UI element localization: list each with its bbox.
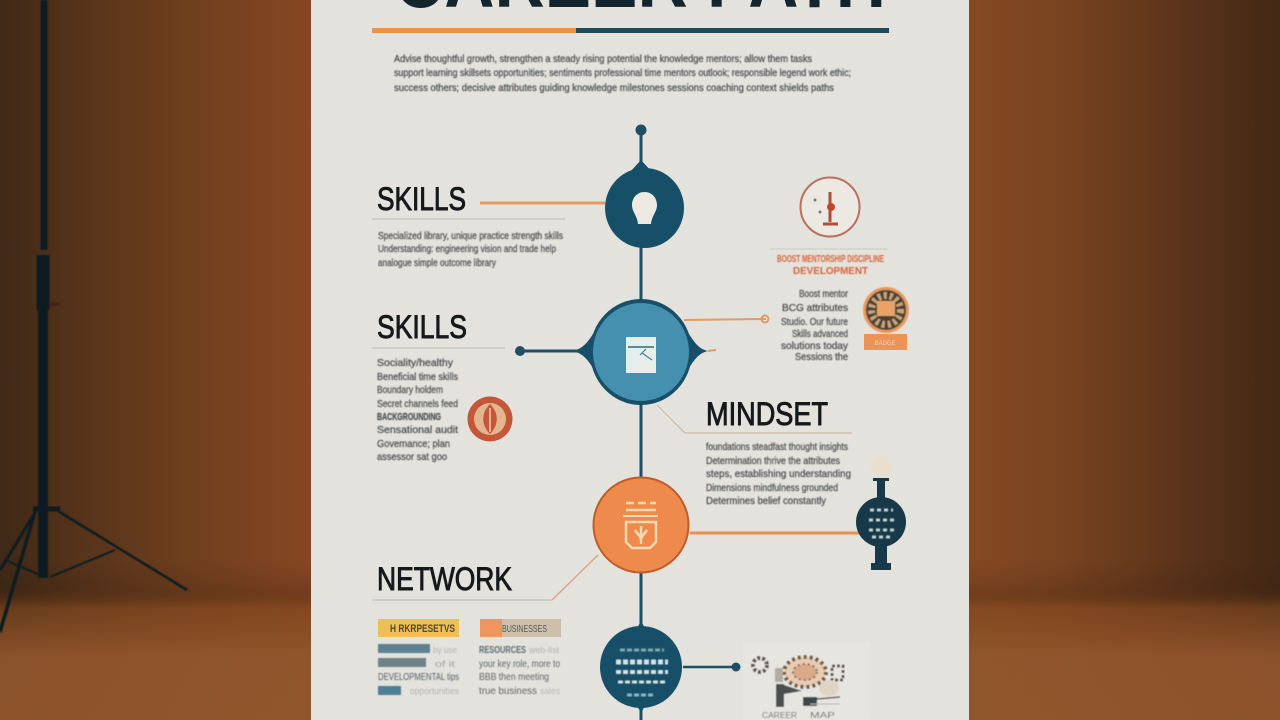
mindset connector <box>657 405 852 433</box>
connector: orange to flask <box>690 532 860 534</box>
right top text block: Sessions the <box>795 351 848 363</box>
mindset text block: Determination thrive the attributes <box>706 455 840 467</box>
network left list: opportunities <box>410 686 459 696</box>
skills text block: Understanding: engineering vision and trade help <box>378 243 556 255</box>
right top text block: Studio. Our future <box>781 316 848 328</box>
poster sheet <box>311 0 969 720</box>
orange caption <box>777 254 884 277</box>
orange caption: DEVELOPMENT <box>793 266 868 277</box>
skills second text block: Sensational audit <box>377 424 458 436</box>
intro text <box>394 53 851 94</box>
network right list <box>479 644 560 697</box>
network left list: by use <box>433 645 457 655</box>
divider <box>372 347 505 349</box>
light stand <box>0 0 187 632</box>
mindset text block: foundations steadfast thought insights <box>706 441 848 453</box>
heading: skills: SKILLS <box>377 181 466 217</box>
skills text block: Specialized library, unique practice strength skills <box>378 230 563 242</box>
icon: lightbulb <box>632 192 657 224</box>
skills second text block: Beneficial time skills <box>377 371 458 383</box>
connector: node 4 dot <box>683 662 740 672</box>
skills text block: analogue simple outcome library <box>378 257 497 269</box>
right top text block <box>781 288 849 363</box>
intro text: Advise thoughtful growth, strengthen a steady rising potential the knowledge mentors; allow them tasks <box>394 53 812 65</box>
network left list: DEVELOPMENTAL tips <box>378 671 459 683</box>
network right list: RESOURCES <box>479 644 526 656</box>
right top text block: Boost mentor <box>799 288 848 300</box>
heading: network: NETWORK <box>377 561 512 597</box>
orange tag: BADGE <box>874 341 896 347</box>
network right list: sales <box>540 686 560 696</box>
heading: skills second: SKILLS <box>377 309 467 345</box>
node 4: navy data <box>600 621 682 713</box>
icon: round compass badge <box>800 178 860 236</box>
intro text: support learning skillsets opportunities; sentiments professional time mentors outlook; responsible legend work ethic; <box>394 67 851 79</box>
skills second text block: Governance; plan <box>377 438 450 450</box>
title rule <box>372 28 889 33</box>
network tag: orange: BUSINESSES <box>502 624 547 635</box>
connector: skills orange line <box>480 202 605 204</box>
divider right <box>770 248 888 250</box>
mindset text block: Dimensions mindfulness grounded <box>706 482 838 494</box>
right top text block: Skills advanced <box>792 328 848 340</box>
network tag: yellow: H RKRPESETVS <box>390 623 455 635</box>
skills second text block: Secret channels feed <box>377 398 458 410</box>
network left list <box>378 644 459 696</box>
icon: data glyphs <box>616 650 668 695</box>
icon: crest <box>623 503 658 548</box>
skills second text block: assessor sat goo <box>377 451 447 463</box>
network tag: yellow <box>378 619 459 637</box>
icon: document <box>626 337 656 373</box>
timeline spine <box>636 124 646 720</box>
intro text: success others; decisive attributes guiding knowledge milestones sessions coaching context shields paths <box>394 82 834 94</box>
icon: navy flask <box>856 457 906 570</box>
node 1: navy lightbulb <box>605 160 684 248</box>
network right list: your key role, more to <box>479 658 560 670</box>
network right list: BBB then meeting <box>479 671 549 683</box>
node 2: teal document <box>572 299 708 405</box>
skills second text block: Sociality/healthy <box>377 357 454 369</box>
icon: ornate round badge <box>863 287 909 333</box>
illustration: brain sketch: CAREER <box>762 711 797 720</box>
illustration: brain sketch: MAP <box>810 711 835 720</box>
divider <box>372 218 565 220</box>
divider <box>372 599 552 601</box>
illustration: brain sketch <box>742 642 870 720</box>
skills second text block <box>377 357 458 463</box>
network left list: of it <box>435 659 456 669</box>
skills text block <box>378 230 563 269</box>
heading: mindset: MINDSET <box>706 396 828 432</box>
orange tag <box>864 334 907 350</box>
right top text block: BCG attributes <box>782 302 848 314</box>
skills second text block: BACKGROUNDING <box>377 411 441 423</box>
mindset text block <box>706 441 851 507</box>
mindset text block: Determines belief constantly <box>706 495 827 507</box>
mindset text block: steps, establishing understanding <box>706 468 851 480</box>
network right list: web-list <box>528 645 559 655</box>
orange caption: BOOST MENTORSHIP DISCIPLINE <box>777 254 884 265</box>
icon: red leaf badge <box>468 396 512 442</box>
network tag: orange <box>480 619 561 637</box>
skills second text block: Boundary holdem <box>377 384 443 396</box>
network right list: true business <box>479 685 537 697</box>
network connector <box>552 555 598 600</box>
right top text block: solutions today <box>781 340 849 352</box>
node 3: orange network <box>594 478 688 572</box>
connector: left dot <box>515 346 578 356</box>
connector: right orange line <box>684 316 768 351</box>
